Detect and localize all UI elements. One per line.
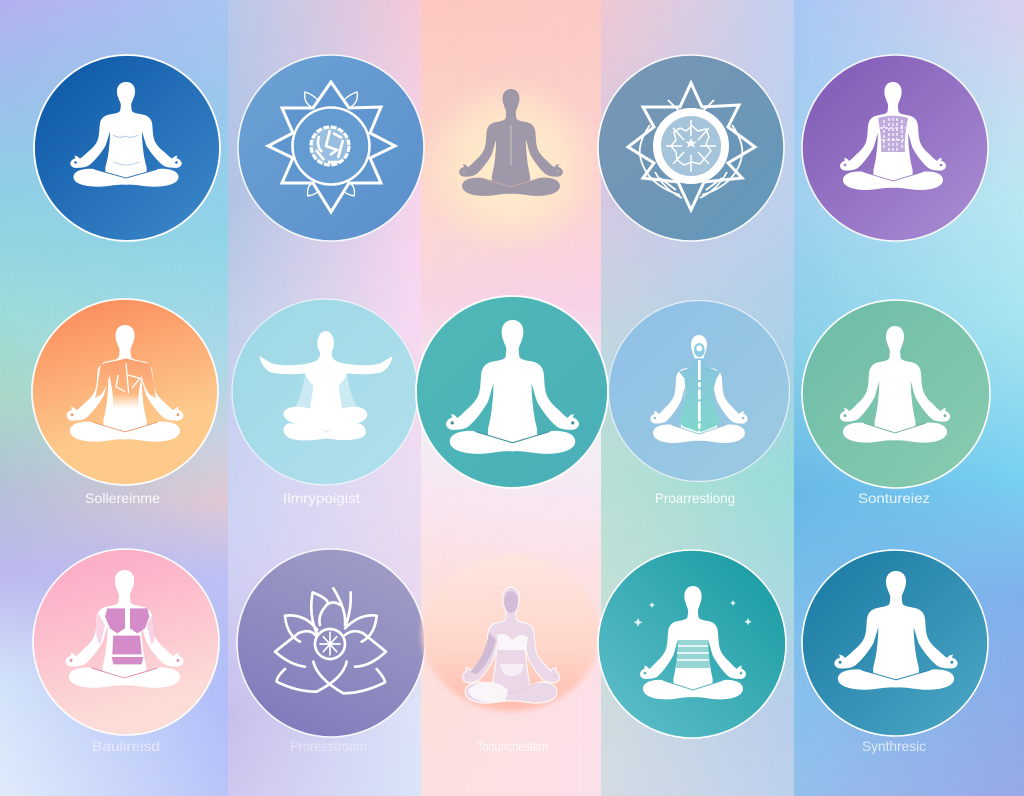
icon 10: green circle with figure	[802, 300, 990, 488]
label: row 2 column 3: Toouncnestem	[477, 738, 548, 754]
label: row 2 column 2: Proresstroam	[290, 738, 367, 754]
panel: background column 5	[794, 0, 1024, 796]
label: row 2 column 1: Baulireisd	[92, 738, 160, 754]
icon 2: blue circle with star mandala	[238, 55, 424, 241]
panel: background column 4	[601, 0, 794, 796]
icon 4: slate circle with mandala	[598, 55, 784, 241]
label: row 1 column 4: Proarrestiong	[655, 490, 735, 506]
icon 1: blue circle with figure	[34, 55, 220, 241]
icon 6: orange circle with figure	[32, 299, 218, 485]
label: row 1 column 1: Sollereinme	[85, 490, 160, 506]
icon 14: teal circle with figure and sparkles	[598, 550, 786, 738]
label: row 2 column 5: Synthresic	[862, 738, 926, 754]
label: row 1 column 5: Sontureiez	[858, 490, 930, 506]
icon 12: purple circle with lotus	[237, 549, 425, 737]
icon 15: deep teal circle with figure	[802, 550, 988, 736]
icon 13: peach glow with translucent figure	[422, 555, 600, 711]
icon 8: large teal circle with figure	[416, 296, 608, 488]
icon 9: sky blue circle with teal torso figure	[608, 300, 790, 482]
icon 3: muted figure with warm glow	[419, 73, 603, 257]
panel: background column 3	[421, 0, 601, 796]
label: row 1 column 2: Ilmrypoigist	[283, 490, 360, 506]
icon 5: purple circle with figure	[802, 55, 988, 241]
icon 7: light blue circle with arms-spread figure	[232, 299, 418, 485]
panel: background column 1	[0, 0, 228, 796]
panel: background column 2	[228, 0, 421, 796]
icon 11: pink circle with figure	[33, 549, 219, 735]
